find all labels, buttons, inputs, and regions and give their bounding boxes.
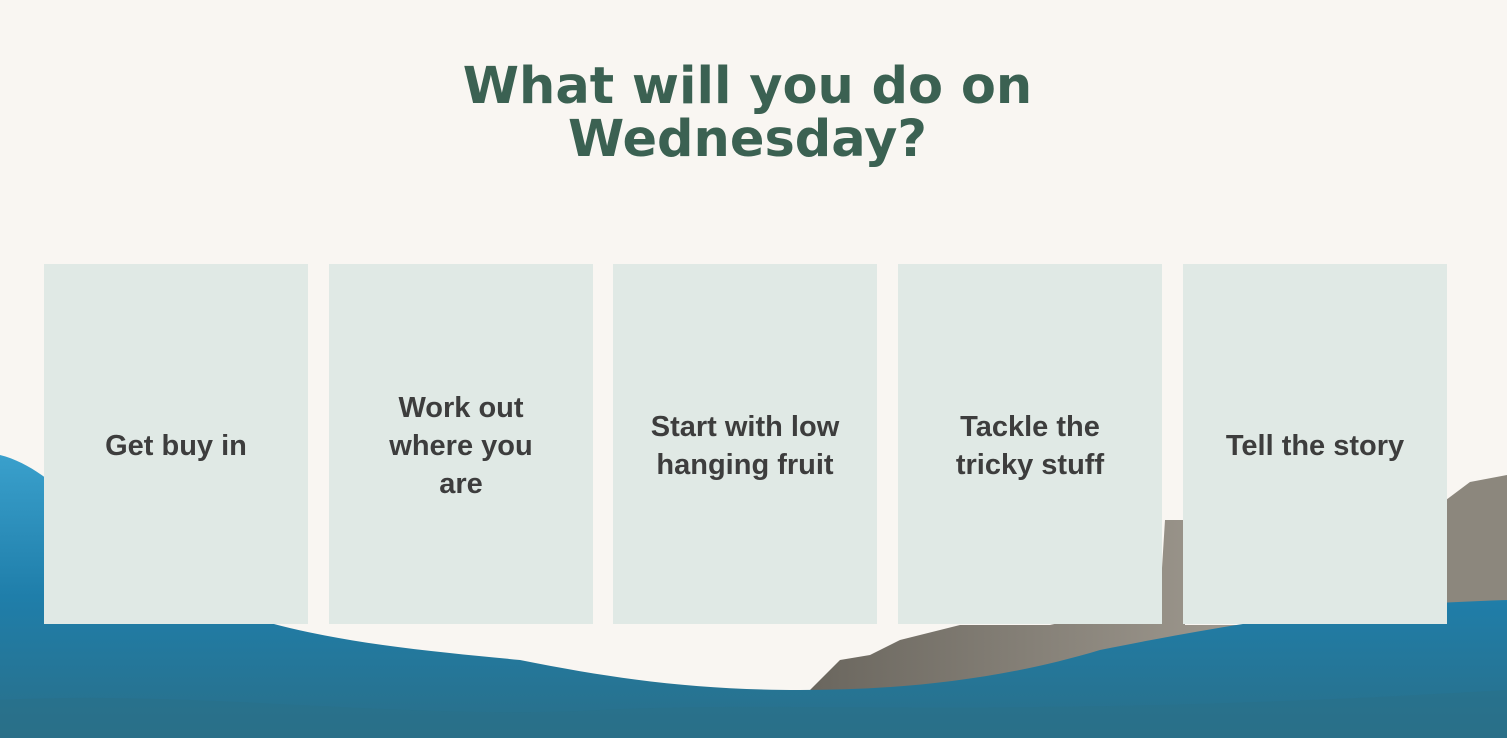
card: tell the story <box>1183 264 1447 624</box>
coastline village <box>810 520 1250 690</box>
card: work out where you are: Work out where you are <box>389 392 533 500</box>
card: get buy in <box>44 264 308 624</box>
card: tell the story: Tell the story <box>1226 430 1404 462</box>
card: low hanging fruit <box>613 264 877 624</box>
title: Wednesday? <box>568 110 927 169</box>
title <box>463 57 1032 169</box>
card: tricky stuff: Tackle the tricky stuff <box>956 411 1104 481</box>
title: What will you do on <box>463 57 1032 116</box>
card: get buy in: Get buy in <box>105 430 247 462</box>
card: low hanging fruit: Start with low hanging fruit <box>651 411 839 481</box>
card: work out where you are <box>329 264 593 624</box>
card: tricky stuff <box>898 264 1162 624</box>
